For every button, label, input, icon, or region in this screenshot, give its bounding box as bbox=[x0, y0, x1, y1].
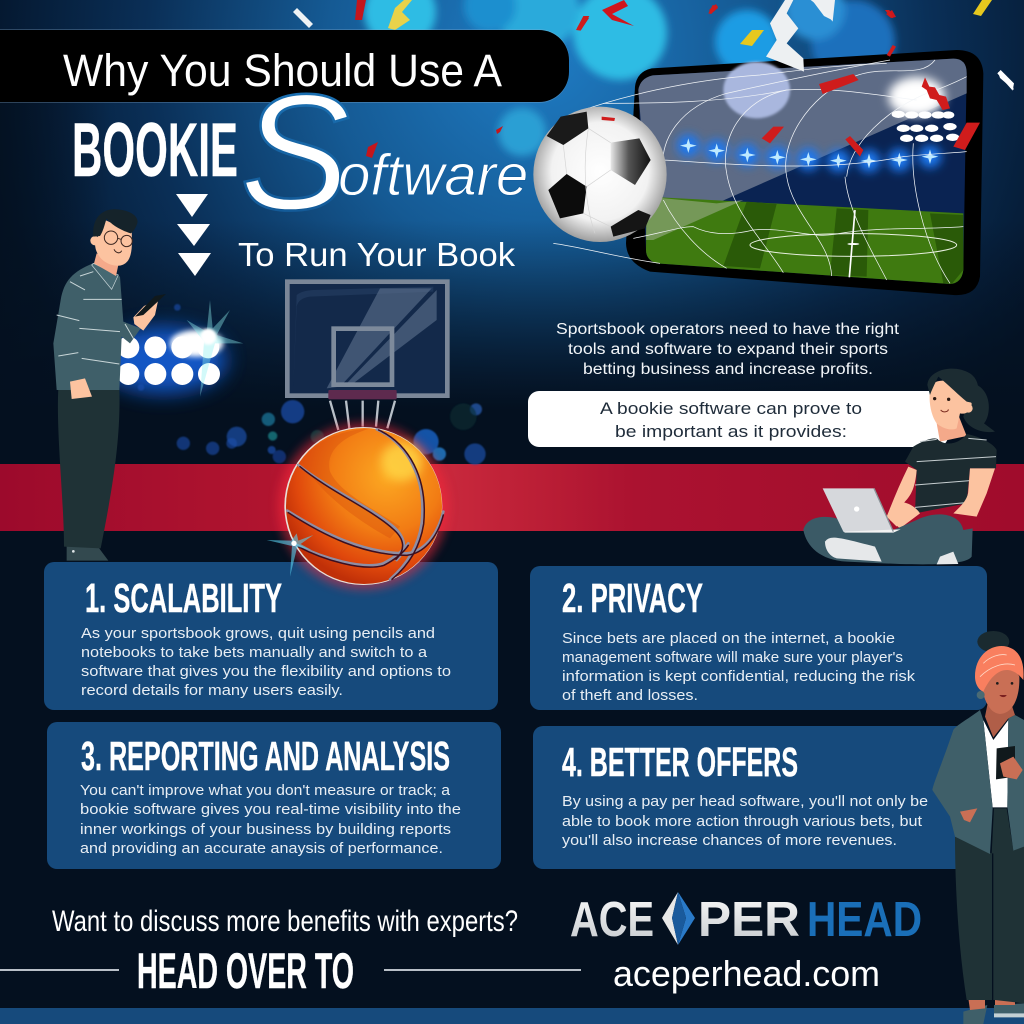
panel 4: better offers: you'll also increase chances of more revenues. bbox=[562, 832, 897, 849]
confetti on phone bbox=[576, 5, 980, 157]
panel 1: scalability: As your sportsbook grows, quit using pencils and bbox=[81, 625, 435, 642]
basketball bbox=[267, 423, 449, 589]
panel 2: privacy: management software will make sure your player's bbox=[562, 649, 903, 666]
title banner bbox=[0, 29, 569, 103]
footer head over to: HEAD OVER TO bbox=[137, 943, 354, 999]
panel 1: scalability bbox=[44, 562, 498, 710]
logo: Ace Per Head: HEAD bbox=[807, 893, 922, 947]
white streamer bbox=[766, 0, 804, 72]
panel 3: reporting and analysis: and providing an accurate anaysis of performance. bbox=[80, 840, 443, 857]
intro text bbox=[556, 321, 900, 378]
callout pill: be important as it provides: bbox=[615, 423, 847, 441]
callout pill: A bookie software can prove to bbox=[600, 400, 862, 418]
soccer ball bbox=[533, 107, 667, 242]
confetti bbox=[293, 0, 1014, 158]
floodlight bbox=[888, 77, 959, 142]
panel 4: better offers: able to book more action through various bets, but bbox=[562, 813, 923, 830]
panel 3: reporting and analysis bbox=[47, 722, 501, 869]
man figure bbox=[53, 209, 166, 561]
panel 1: scalability: record details for many users easily. bbox=[81, 682, 343, 699]
illustration: basketball hoop and ball bbox=[227, 282, 486, 589]
illustration: man with phone and floodlights bbox=[53, 209, 243, 561]
floodlights bbox=[100, 300, 243, 455]
icon: three down arrows bbox=[176, 194, 211, 276]
callout pill bbox=[528, 391, 948, 447]
panel 2: privacy: of theft and losses. bbox=[562, 687, 698, 704]
illustration: phone with stadium and soccer ball bbox=[533, 0, 1014, 295]
logo: Ace Per Head bbox=[570, 892, 922, 947]
illustration: woman with laptop bbox=[803, 369, 997, 564]
panel 1: scalability: notebooks to take bets manually and switch to a bbox=[81, 644, 428, 661]
intro text: betting business and increase profits. bbox=[583, 361, 873, 378]
title word: BOOKIE: BOOKIE bbox=[72, 108, 238, 193]
panel 1: scalability: software that gives you the flexibility and options to bbox=[81, 663, 451, 680]
website url: aceperhead.com bbox=[613, 953, 880, 994]
bokeh lights bbox=[364, 0, 895, 156]
title line 1: Why You Should Use A bbox=[63, 45, 502, 96]
panel 3: reporting and analysis: bookie software gives you real-time visibility into the bbox=[80, 801, 461, 818]
intro text: Sportsbook operators need to have the right bbox=[556, 321, 900, 338]
panel 3: reporting and analysis: inner workings of your business by building reports bbox=[80, 821, 451, 838]
icon: logo diamond bbox=[662, 892, 695, 945]
panel 2: privacy bbox=[530, 566, 987, 710]
panel 4: better offers bbox=[533, 726, 973, 869]
panel 3: reporting and analysis: You can't improve what you don't measure or track; a bbox=[80, 782, 451, 799]
backboard bbox=[287, 282, 447, 396]
title line 3: To Run Your Book bbox=[238, 236, 516, 273]
title word: Software script: S bbox=[240, 60, 350, 244]
rim and net bbox=[328, 390, 397, 430]
bokeh behind hoop bbox=[227, 400, 486, 465]
panel 3: reporting and analysis: 3. REPORTING AND ANALYSIS bbox=[81, 733, 450, 779]
panel 2: privacy: information is kept confidential, reducing the risk bbox=[562, 668, 916, 685]
title word: Software script: oftware bbox=[338, 143, 528, 208]
logo: Ace Per Head: ACE bbox=[570, 893, 654, 947]
footer prompt: Want to discuss more benefits with experts? bbox=[52, 905, 518, 938]
panel 1: scalability: 1. SCALABILITY bbox=[85, 575, 282, 621]
net lines bbox=[553, 60, 967, 283]
panel 2: privacy: 2. PRIVACY bbox=[562, 575, 703, 621]
logo: Ace Per Head: PER bbox=[698, 893, 800, 947]
illustration: woman with turban bbox=[932, 631, 1024, 1024]
phone screen bbox=[638, 59, 967, 284]
panel 4: better offers: By using a pay per head software, you'll not only be bbox=[562, 793, 928, 810]
bottom strip bbox=[0, 1008, 1024, 1024]
panel 4: better offers: 4. BETTER OFFERS bbox=[562, 739, 798, 785]
panel 2: privacy: Since bets are placed on the internet, a bookie bbox=[562, 630, 895, 647]
phone body bbox=[626, 50, 983, 295]
intro text: tools and software to expand their sports bbox=[568, 341, 888, 358]
stadium lights row bbox=[677, 134, 941, 172]
red band bbox=[0, 464, 1024, 531]
